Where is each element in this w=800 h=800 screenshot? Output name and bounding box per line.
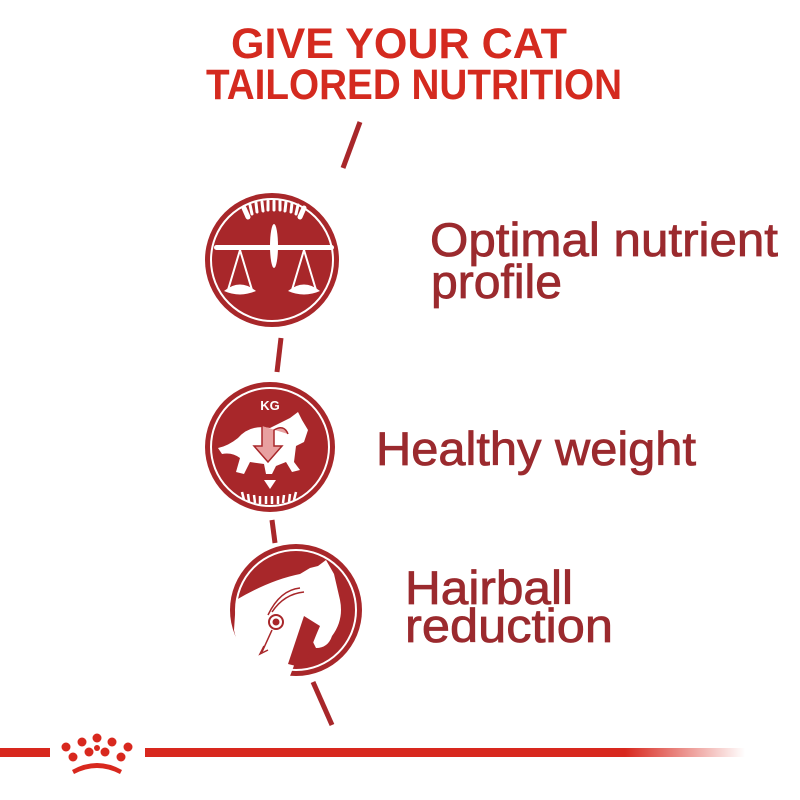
text: healthy weight: Healthy weight [376,422,696,475]
bottom bar [0,748,745,757]
icon: crown logo [62,734,132,774]
icon: healthy weight [205,382,335,512]
text: optimal nutrient profile [430,213,778,308]
text: hairball reduction: reduction [405,599,613,652]
title: GIVE YOUR CAT [231,20,567,68]
title: TAILORED NUTRITION [206,61,622,109]
title [206,20,622,109]
timeline dashes [272,122,360,725]
text: optimal nutrient profile: Optimal nutrient [430,213,778,266]
text: hairball reduction: Hairball [405,561,573,614]
icon: healthy weight: KG [260,398,280,413]
text: optimal nutrient profile: profile [431,255,562,308]
icon: nutrient scale [205,193,339,327]
text: hairball reduction [405,561,613,652]
icon: hairball [230,544,362,676]
